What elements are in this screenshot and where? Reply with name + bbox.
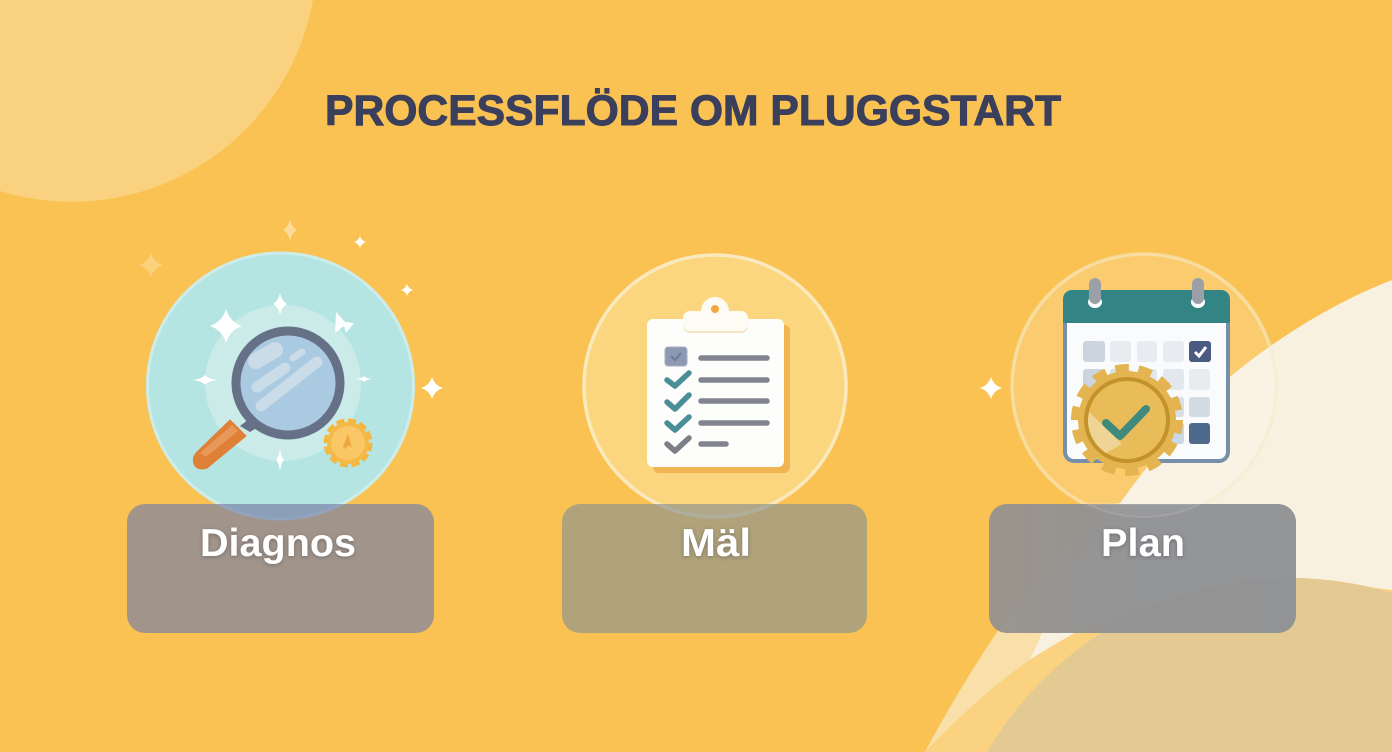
glass circle: [584, 255, 846, 517]
glass circle: [1012, 254, 1276, 518]
step 2: mål icon: [584, 255, 846, 517]
checklist rows: [667, 373, 767, 451]
sparkle: [980, 377, 1002, 399]
checklist box row: [665, 347, 767, 366]
pale wave bottom right: [925, 500, 1392, 752]
small gold gear: [326, 421, 370, 465]
yellow wave bottom right: [925, 578, 1392, 752]
calendar rings: [1088, 284, 1205, 308]
clipboard clip: [683, 297, 748, 333]
label: mäl: Mäl: [681, 522, 751, 565]
magnifier lens: [236, 331, 340, 435]
circle rim showing through panel: [1087, 504, 1201, 517]
corner circle top left: [0, 0, 313, 202]
cream wave bottom right: [1000, 280, 1392, 752]
calendar: [1063, 284, 1230, 461]
glass circle: [148, 253, 414, 519]
step 1: diagnos icon: [139, 219, 443, 519]
inner halo: [205, 305, 361, 461]
label panel: plan: [989, 504, 1296, 633]
label panel: diagnos: [127, 504, 434, 633]
tan circle bottom right: [987, 578, 1392, 752]
label: plan: Plan: [1101, 522, 1185, 565]
inner sparkles: [193, 293, 372, 471]
gold gear with check: [1077, 370, 1177, 470]
title: PROCESSFLÖDE OM PLUGGSTART: [325, 87, 1061, 135]
label panel: mål: [562, 504, 867, 633]
magnifier handle: [193, 412, 263, 469]
step 3: plan icon: [980, 254, 1276, 518]
outer sparkles: [139, 219, 443, 399]
calendar grid: [1083, 341, 1211, 444]
label: diagnos: Diagnos: [200, 522, 356, 565]
clipboard sheet: [647, 319, 784, 467]
clipboard shadow: [653, 325, 790, 473]
